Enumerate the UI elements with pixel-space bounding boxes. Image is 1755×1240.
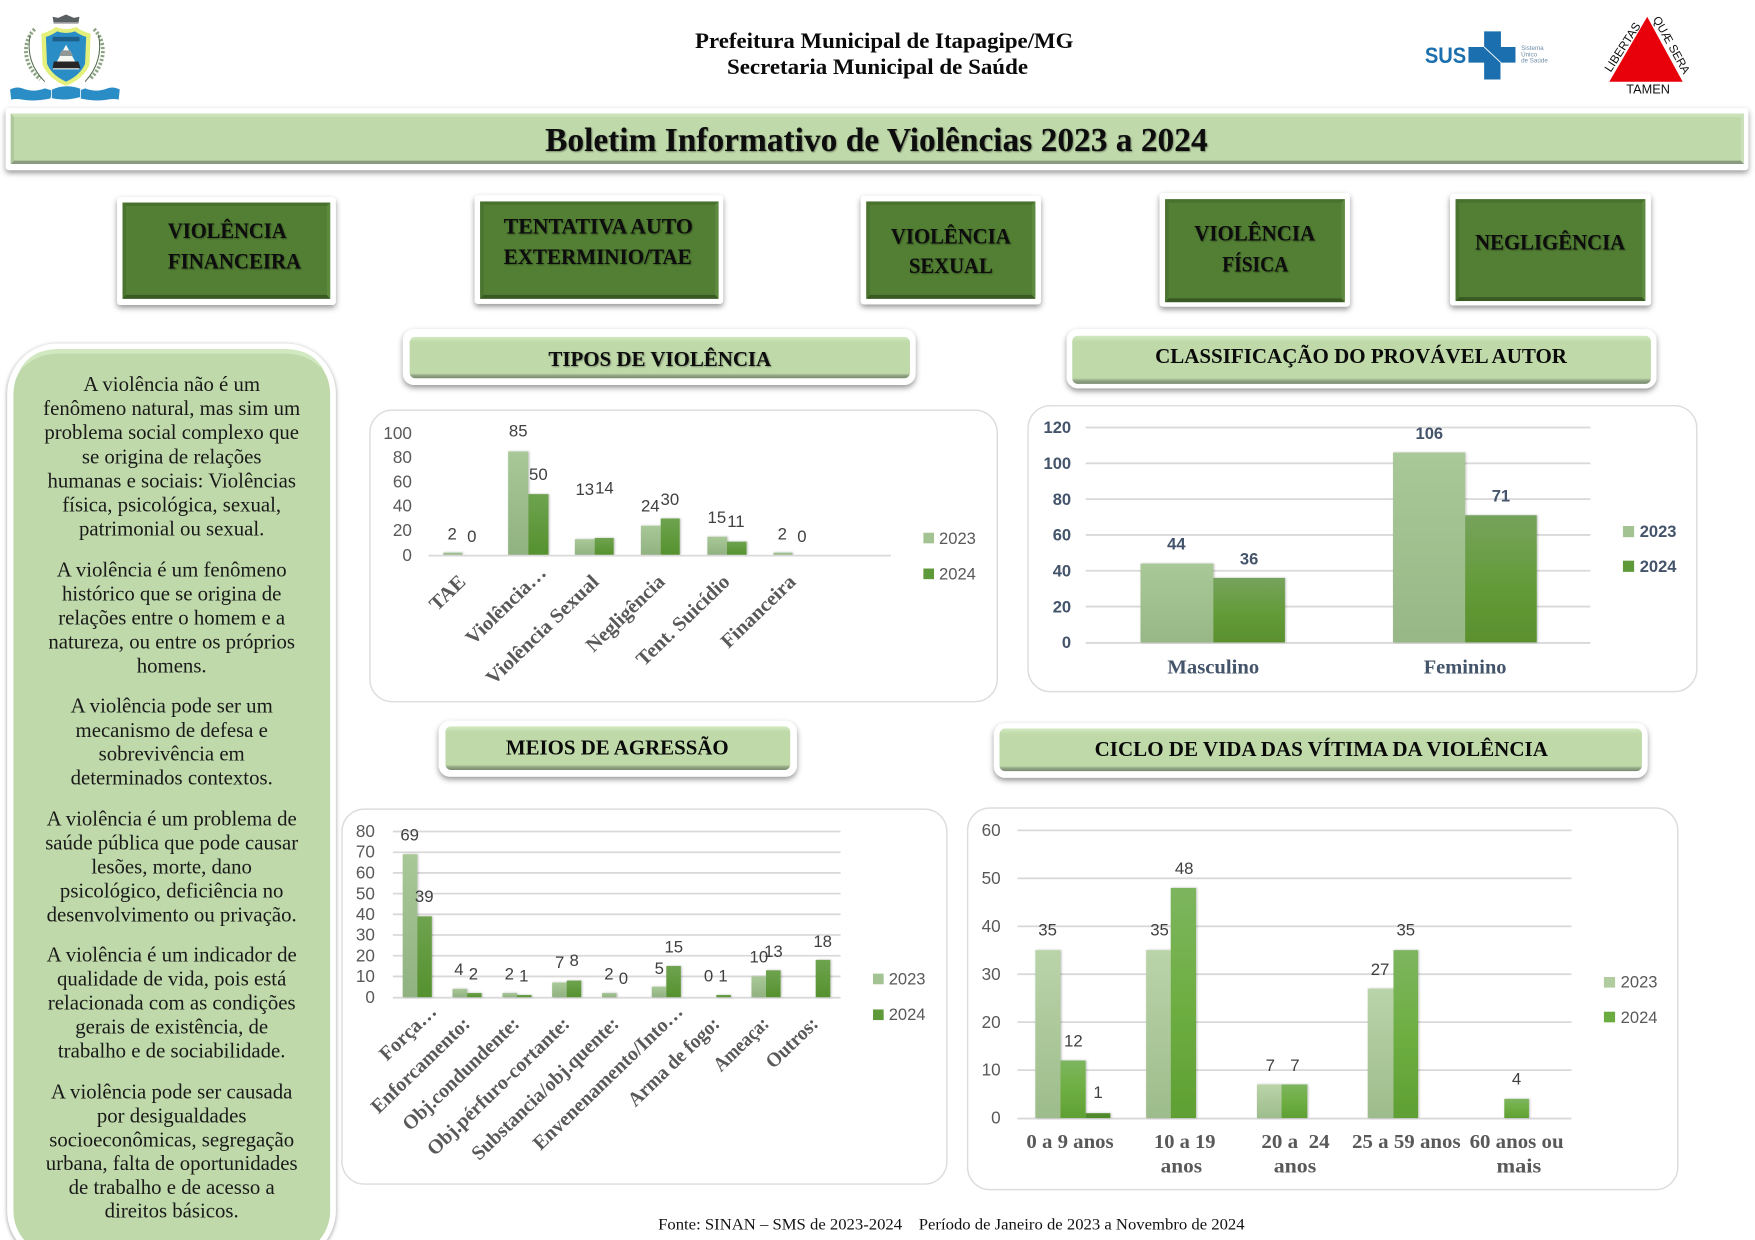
category labels: Outros: bbox=[762, 1013, 823, 1073]
paragraph 1: humanas e sociais: Violências bbox=[47, 468, 296, 492]
y axis labels: 0 bbox=[365, 988, 375, 1007]
category labels: Obj.pérfuro-cortante: bbox=[423, 1013, 574, 1160]
data labels: 27 bbox=[1371, 960, 1389, 979]
bars bbox=[403, 854, 830, 997]
heading: tipos de violência: TIPOS DE VIOLÊNCIA bbox=[548, 347, 772, 371]
heading: meios de agressão: MEIOS DE AGRESSÃO bbox=[506, 736, 729, 760]
category labels: 10 a 19 bbox=[1154, 1132, 1216, 1153]
logo: Minas Gerais triangle bbox=[1602, 14, 1692, 96]
paragraph 4: lesões, morte, dano bbox=[91, 854, 252, 878]
category labels bbox=[1167, 657, 1507, 678]
legend bbox=[923, 529, 976, 584]
data labels: 4 bbox=[454, 960, 464, 979]
data labels: 35 bbox=[1038, 921, 1057, 940]
data labels: 2 bbox=[469, 964, 478, 983]
heading: classificação do provável autor: CLASSIFICAÇÃO DO PROVÁVEL AUTOR bbox=[1155, 344, 1568, 368]
logo: SUS bbox=[1425, 31, 1548, 79]
paragraph 4: desenvolvimento ou privação. bbox=[47, 903, 297, 927]
panel: ciclo de vida chart bbox=[968, 808, 1678, 1190]
category labels: mais bbox=[1496, 1157, 1542, 1178]
y axis labels: 40 bbox=[982, 917, 1001, 936]
category box: tentativa auto extermínio: EXTERMINIO/TAE bbox=[504, 244, 692, 269]
paragraph 1: fenômeno natural, mas sim um bbox=[43, 396, 300, 420]
category box: negligência bbox=[1450, 194, 1651, 306]
data labels: 7 bbox=[1266, 1056, 1275, 1075]
data labels: 35 bbox=[1396, 921, 1415, 940]
y axis labels: 50 bbox=[982, 869, 1001, 888]
paragraph 2 bbox=[48, 557, 295, 678]
data labels: 0 bbox=[467, 527, 476, 546]
y axis labels: 20 bbox=[1053, 597, 1071, 616]
legend: 2024 bbox=[1640, 557, 1677, 576]
y axis labels: 20 bbox=[393, 521, 412, 540]
category labels: Feminino bbox=[1424, 657, 1507, 678]
data labels: 2 bbox=[604, 964, 614, 983]
data labels: 71 bbox=[1492, 487, 1510, 505]
category box: violência sexual bbox=[861, 196, 1041, 304]
category box: violência financeira: VIOLÊNCIA bbox=[168, 217, 287, 243]
y axis labels: 10 bbox=[982, 1061, 1001, 1080]
category labels: Tent. Suicídio bbox=[632, 571, 734, 671]
data labels: 2 bbox=[448, 525, 457, 544]
category labels: Violência… bbox=[461, 562, 551, 649]
paragraph 2: histórico que se origina de bbox=[62, 581, 281, 605]
y axis labels bbox=[383, 424, 412, 565]
category box: violência financeira: FINANCEIRA bbox=[168, 248, 301, 273]
paragraph 5: gerais de existência, de bbox=[75, 1014, 268, 1038]
header: institution names bbox=[695, 28, 1073, 79]
header: institution names: Secretaria Municipal de Saúde bbox=[727, 54, 1028, 79]
category labels: Ameaça: bbox=[709, 1013, 774, 1076]
y axis labels: 30 bbox=[356, 926, 375, 945]
footer: source note: Fonte: SINAN – SMS de 2023-2024 Período de Janeiro de 2023 a Novembro de 2024 bbox=[658, 1215, 1245, 1233]
category labels bbox=[367, 1001, 823, 1165]
data labels: 2 bbox=[778, 525, 787, 544]
title bar bbox=[6, 108, 1748, 170]
paragraph 2: natureza, ou entre os próprios bbox=[48, 629, 295, 653]
y axis labels: 40 bbox=[356, 905, 375, 924]
y axis labels bbox=[356, 822, 375, 1007]
category labels: Envenenamento/Into… bbox=[529, 1001, 687, 1155]
paragraph 4: saúde pública que pode causar bbox=[45, 830, 298, 854]
y axis labels: 80 bbox=[356, 822, 375, 841]
legend: 2024 bbox=[1621, 1008, 1658, 1027]
paragraph 2: relações entre o homem e a bbox=[58, 605, 285, 629]
data labels: 7 bbox=[1290, 1056, 1300, 1075]
legend: 2024 bbox=[939, 565, 976, 584]
paragraph 3: sobrevivência em bbox=[99, 741, 245, 765]
data labels bbox=[1038, 859, 1521, 1102]
data labels: 8 bbox=[570, 951, 579, 970]
data labels: 50 bbox=[529, 465, 548, 484]
category labels: Negligência bbox=[582, 571, 669, 657]
logo: Minas Gerais triangle: TAMEN bbox=[1626, 81, 1670, 96]
category labels: 0 a 9 anos bbox=[1026, 1132, 1114, 1153]
paragraph 5: A violência é um indicador de bbox=[47, 942, 297, 966]
y axis labels: 60 bbox=[356, 864, 375, 883]
heading: ciclo de vida bbox=[994, 723, 1648, 778]
data labels: 4 bbox=[1512, 1070, 1521, 1089]
category box: negligência: NEGLIGÊNCIA bbox=[1475, 228, 1625, 254]
panel: left text column bbox=[7, 344, 336, 1240]
paragraph 5: qualidade de vida, pois está bbox=[57, 966, 286, 990]
y axis labels: 20 bbox=[982, 1013, 1001, 1032]
paragraph 6: direitos básicos. bbox=[105, 1199, 239, 1223]
paragraph 4: A violência é um problema de bbox=[47, 806, 297, 830]
category labels: TAE bbox=[425, 571, 470, 615]
y axis labels: 120 bbox=[1044, 418, 1071, 437]
panel: classificação do provável autor chart bbox=[1028, 406, 1697, 692]
bars bbox=[1141, 453, 1537, 642]
category labels: anos bbox=[1161, 1157, 1202, 1178]
data labels: 0 bbox=[619, 969, 628, 988]
y axis labels: 80 bbox=[393, 448, 412, 467]
category labels bbox=[425, 562, 800, 689]
paragraph 3 bbox=[71, 693, 273, 789]
data labels: 12 bbox=[1064, 1032, 1083, 1051]
paragraph 1: A violência não é um bbox=[83, 372, 260, 396]
y axis labels: 0 bbox=[991, 1109, 1001, 1128]
paragraph 3: determinados contextos. bbox=[71, 765, 273, 789]
data labels: 14 bbox=[595, 479, 614, 498]
category box: tentativa auto extermínio bbox=[475, 195, 723, 304]
y axis labels: 100 bbox=[1044, 454, 1071, 473]
paragraph 4: psicológico, deficiência no bbox=[60, 878, 283, 902]
y axis labels: 40 bbox=[393, 497, 412, 516]
y axis labels: 60 bbox=[982, 821, 1001, 840]
paragraph 6: por desigualdades bbox=[97, 1103, 246, 1127]
data labels: 44 bbox=[1167, 535, 1186, 554]
category labels: anos bbox=[1274, 1157, 1317, 1178]
paragraph 3: A violência pode ser um bbox=[71, 693, 273, 717]
data labels: 15 bbox=[664, 938, 683, 957]
category box: violência financeira bbox=[117, 197, 336, 305]
data labels: 30 bbox=[661, 490, 679, 509]
category box: violência física: FÍSICA bbox=[1222, 252, 1288, 277]
heading: meios de agressão bbox=[439, 721, 797, 777]
y axis labels: 40 bbox=[1053, 561, 1071, 580]
legend: 2023 bbox=[1640, 522, 1677, 541]
panel: tipos de violência chart bbox=[370, 410, 997, 702]
data labels: 69 bbox=[400, 826, 419, 845]
paragraph 4 bbox=[45, 806, 298, 927]
y axis labels bbox=[982, 821, 1001, 1128]
data labels: 39 bbox=[415, 887, 434, 906]
logo: SUS: SUS bbox=[1425, 43, 1466, 68]
header: institution names: Prefeitura Municipal de Itapagipe/MG bbox=[695, 28, 1073, 53]
data labels: 85 bbox=[509, 422, 528, 441]
paragraph 1: se origina de relações bbox=[82, 444, 261, 468]
data labels: 1 bbox=[519, 967, 528, 986]
y axis labels: 0 bbox=[402, 546, 412, 565]
y axis labels: 0 bbox=[1062, 633, 1071, 652]
category box: violência sexual: VIOLÊNCIA bbox=[891, 223, 1011, 249]
category box: violência sexual: SEXUAL bbox=[909, 253, 993, 278]
category box: tentativa auto extermínio: TENTATIVA AUTO bbox=[504, 214, 693, 239]
data labels bbox=[1167, 424, 1510, 569]
category box: violência física: VIOLÊNCIA bbox=[1194, 219, 1315, 245]
data labels: 35 bbox=[1150, 921, 1169, 940]
category labels: Masculino bbox=[1167, 657, 1259, 678]
legend bbox=[873, 970, 926, 1024]
category labels: Força… bbox=[375, 1001, 441, 1065]
logo: Minas Gerais triangle: LIBERTAS bbox=[1602, 20, 1644, 74]
heading: classificação do provável autor bbox=[1067, 329, 1657, 388]
data labels: 24 bbox=[641, 497, 660, 516]
category labels: 25 a 59 anos bbox=[1352, 1132, 1461, 1153]
data labels: 48 bbox=[1175, 859, 1194, 878]
heading: ciclo de vida: CICLO DE VIDA DAS VÍTIMA DA VIOLÊNCIA bbox=[1095, 737, 1549, 761]
logo: SUS: de Saúde bbox=[1521, 57, 1548, 64]
data labels: 1 bbox=[1093, 1083, 1103, 1102]
title text: Boletim Informativo de Violências 2023 a 2024 bbox=[545, 122, 1208, 159]
paragraph 5: relacionada com as condições bbox=[48, 990, 296, 1014]
data labels bbox=[400, 826, 832, 988]
paragraph 6: de trabalho e de acesso a bbox=[69, 1175, 275, 1199]
paragraph 6: socioeconômicas, segregação bbox=[49, 1128, 294, 1152]
bars bbox=[1035, 888, 1529, 1118]
data labels: 15 bbox=[708, 508, 726, 527]
category labels: 20 a 24 bbox=[1261, 1132, 1330, 1153]
category labels: Substancia/obj.quente: bbox=[467, 1013, 624, 1165]
data labels: 13 bbox=[575, 480, 594, 499]
paragraph 6: A violência pode ser causada bbox=[51, 1079, 292, 1103]
legend: 2023 bbox=[1621, 973, 1658, 992]
category labels: Obj.condundente: bbox=[398, 1013, 524, 1135]
legend bbox=[1623, 522, 1677, 576]
data labels: 13 bbox=[764, 942, 783, 961]
data labels: 0 bbox=[704, 967, 713, 986]
data labels: 1 bbox=[718, 967, 728, 986]
category labels: Financeira bbox=[717, 571, 800, 653]
paragraph 1 bbox=[43, 372, 300, 540]
heading: tipos de violência bbox=[403, 329, 916, 385]
paragraph 5: trabalho e de sociabilidade. bbox=[58, 1039, 285, 1063]
category box: violência física bbox=[1160, 193, 1350, 307]
y axis labels: 100 bbox=[383, 424, 412, 443]
y axis labels: 30 bbox=[982, 965, 1001, 984]
y axis labels: 20 bbox=[356, 946, 375, 965]
category labels: Violência Sexual bbox=[482, 571, 604, 689]
legend: 2023 bbox=[939, 529, 976, 548]
paragraph 3: mecanismo de defesa e bbox=[76, 718, 268, 742]
data labels: 0 bbox=[797, 527, 807, 546]
panel: meios de agressão chart bbox=[342, 809, 947, 1184]
logo: municipal coat of arms bbox=[10, 15, 120, 100]
paragraph 1: patrimonial ou sexual. bbox=[79, 516, 264, 540]
paragraph 6 bbox=[46, 1079, 298, 1223]
y axis labels: 80 bbox=[1053, 490, 1071, 509]
data labels: 2 bbox=[505, 964, 514, 983]
paragraph 2: A violência é um fenômeno bbox=[57, 557, 287, 581]
bars bbox=[443, 451, 792, 555]
data labels: 10 bbox=[750, 948, 768, 967]
legend: 2023 bbox=[889, 970, 926, 989]
y axis labels bbox=[1044, 418, 1071, 652]
data labels: 11 bbox=[727, 512, 745, 531]
legend bbox=[1604, 973, 1658, 1027]
y axis labels: 10 bbox=[356, 967, 375, 986]
category labels bbox=[1026, 1132, 1564, 1178]
data labels: 18 bbox=[813, 932, 832, 951]
category labels: Arma de fogo: bbox=[624, 1013, 724, 1111]
y axis labels: 60 bbox=[393, 473, 412, 492]
data labels: 5 bbox=[655, 959, 664, 978]
data labels: 36 bbox=[1240, 550, 1258, 569]
data labels: 106 bbox=[1415, 424, 1443, 443]
logo: Minas Gerais triangle: QUÆ SERA bbox=[1650, 14, 1692, 76]
data labels: 7 bbox=[555, 953, 564, 972]
paragraph 2: homens. bbox=[137, 654, 207, 678]
paragraph 1: física, psicológica, sexual, bbox=[62, 492, 281, 516]
data labels bbox=[448, 422, 807, 546]
category labels: Enforcamento: bbox=[367, 1013, 475, 1118]
paragraph 6: urbana, falta de oportunidades bbox=[46, 1151, 298, 1175]
y axis labels: 70 bbox=[356, 842, 375, 861]
logo: SUS: Sistema bbox=[1521, 45, 1544, 52]
paragraph 1: problema social complexo que bbox=[44, 420, 299, 444]
paragraph 5 bbox=[47, 942, 297, 1063]
y axis labels: 50 bbox=[356, 884, 375, 903]
logo: SUS: Único bbox=[1521, 51, 1538, 58]
y axis labels: 60 bbox=[1053, 526, 1071, 545]
legend: 2024 bbox=[889, 1005, 926, 1024]
category labels: 60 anos ou bbox=[1470, 1132, 1564, 1153]
